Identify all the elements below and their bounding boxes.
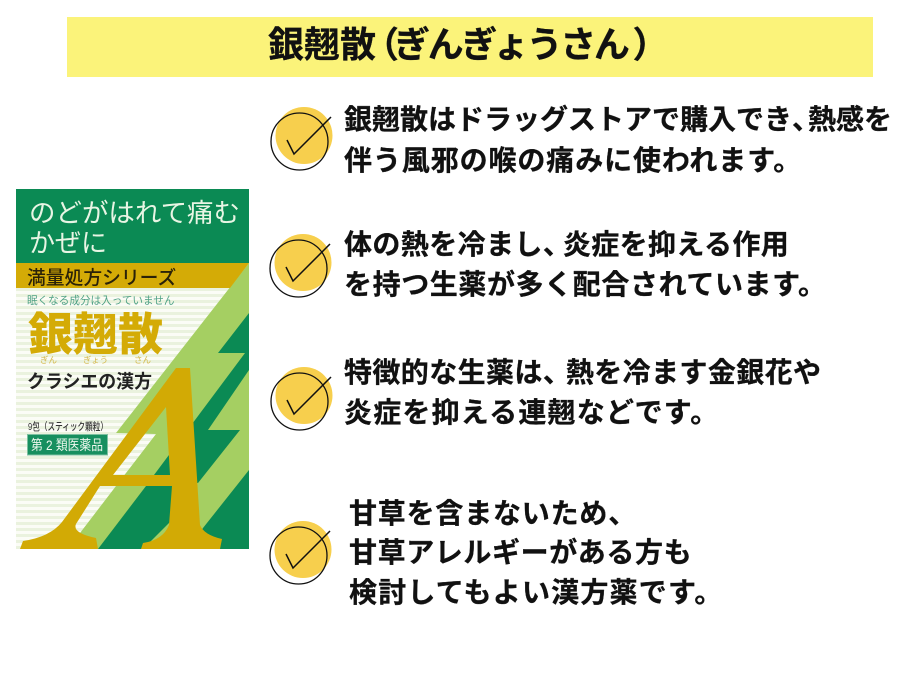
text: 甘草を含まないため、 [349, 498, 637, 529]
icon: check [270, 107, 332, 171]
title banner [67, 17, 873, 77]
series label: 満量処方シリーズ [27, 266, 177, 288]
product reading [40, 355, 152, 365]
text: 体の熱を冷まし、炎症を抑える作用 [344, 229, 789, 260]
product name: 銀翹散 [28, 309, 163, 360]
pack count: 9包（スティック顆粒） [28, 420, 108, 433]
dark green stripes [98, 313, 249, 549]
text: 特徴的な生薬は、熱を冷ます金銀花や [344, 357, 821, 388]
package headline: のどがはれて痛む [29, 198, 240, 228]
icon: check [270, 367, 332, 431]
icon: check [269, 234, 332, 298]
icon: check [269, 521, 332, 585]
check item 2: を持つ生薬が多く配合されています。 [344, 269, 827, 300]
product reading: ぎょう [83, 355, 108, 365]
check item 2 [269, 229, 827, 300]
check item 4: 検討してもよい漢方薬です。 [349, 577, 724, 608]
check item 1: 伴う風邪の喉の痛みに使われます。 [344, 145, 802, 176]
check item 3 [270, 357, 821, 431]
text: 銀翹散はドラッグストアで購入でき、熱感を [344, 104, 892, 135]
check item 4: 甘草アレルギーがある方も [349, 537, 692, 568]
brand name: クラシエの漢方 [27, 371, 152, 392]
light green lightning [80, 263, 249, 549]
title: 銀翹散（ぎんぎょうさん） [268, 24, 668, 65]
drug class badge [28, 434, 108, 455]
gold series band [16, 263, 249, 288]
no-drowsiness note: 眠くなる成分は入っていません [27, 295, 175, 307]
product reading: さん [134, 355, 152, 365]
check item 1 [270, 104, 892, 176]
drug class badge: 第 2 類医薬品 [31, 437, 103, 453]
product reading: ぎん [40, 355, 58, 365]
big letter A [20, 368, 222, 549]
check item 4 [269, 498, 724, 608]
product package: かぜに [29, 228, 107, 258]
top green panel [16, 189, 249, 263]
check item 3: 炎症を抑える連翹などです。 [344, 397, 719, 428]
product package [16, 189, 249, 549]
